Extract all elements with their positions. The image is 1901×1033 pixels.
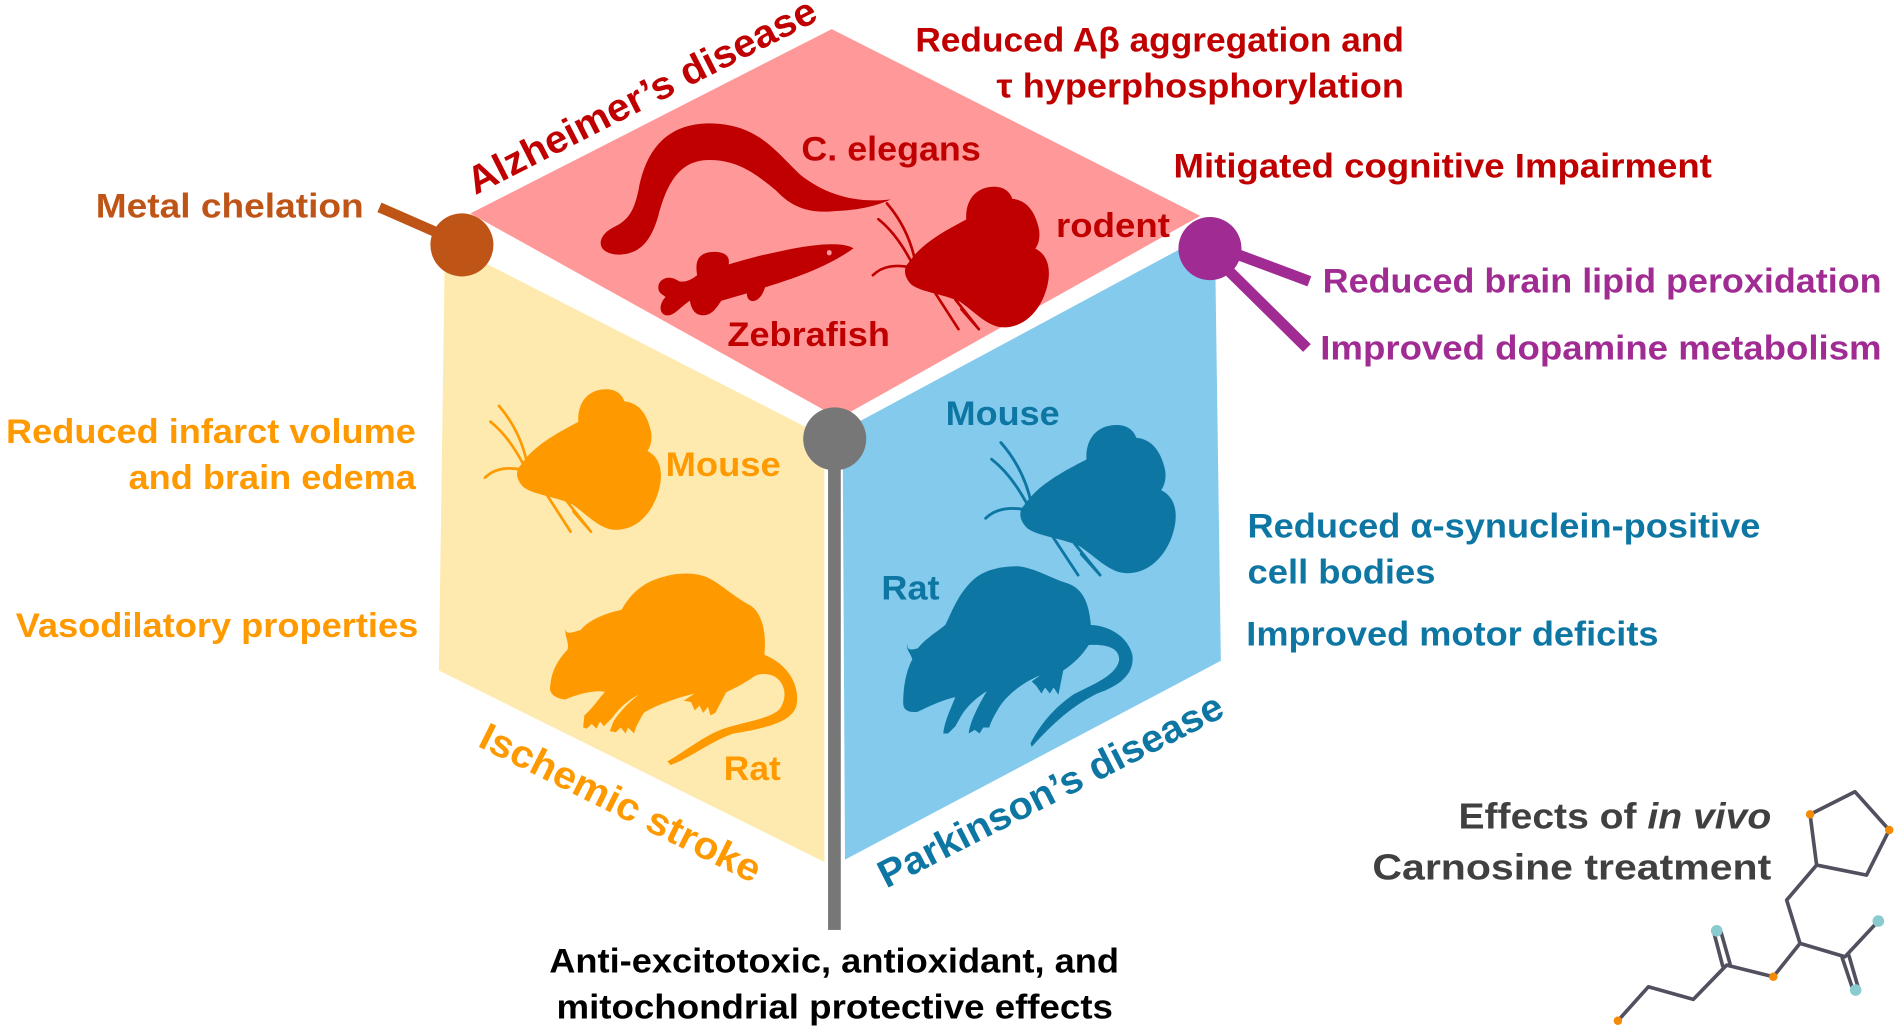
text: shared protective effects: [549, 942, 1119, 1026]
panel: Alzheimer's disease: [470, 29, 1200, 418]
text: stroke outcomes: Vasodilatory properties: [16, 607, 418, 645]
title: Effects of in vivo: [1458, 796, 1771, 837]
text: animal labels, stroke panel: Mouse: [666, 446, 781, 484]
title: [1372, 796, 1771, 887]
text: animal labels, stroke panel: Rat: [724, 750, 781, 788]
text: Alzheimer's outcomes: Mitigated cognitive Impairment: [1174, 148, 1712, 186]
panel: Parkinson's disease: [843, 230, 1221, 860]
text: Parkinson's outcomes: Reduced α-synuclein-positive: [1248, 508, 1760, 546]
icon: zebrafish: [658, 244, 854, 315]
heading: Alzheimer's disease: Alzheimer’s disease: [460, 0, 824, 203]
text: shared protective effects: mitochondrial protective effects: [556, 988, 1113, 1026]
text: purple outcomes: [1320, 263, 1882, 367]
icon: C. elegans worm: [601, 123, 891, 255]
connector: metal chelation pin: [379, 207, 493, 276]
text: stroke outcomes: Reduced infarct volume: [6, 413, 416, 451]
text: Alzheimer's outcomes: τ hyperphosphorylation: [997, 68, 1404, 106]
icon: rat (ischemic stroke): [550, 574, 797, 765]
text: purple outcomes: Improved dopamine metabolism: [1320, 329, 1882, 367]
icon: mouse (Parkinson's disease): [986, 425, 1176, 575]
text: animal labels, Alzheimer's panel: [727, 131, 1170, 354]
text: animal labels, stroke panel: [666, 446, 781, 788]
text: animal labels, Parkinson's panel: Rat: [881, 569, 940, 607]
text: Alzheimer's outcomes: [915, 21, 1712, 186]
text: shared protective effects: Anti-excitotoxic, antioxidant, and: [549, 942, 1119, 980]
text: animal labels, Alzheimer's panel: rodent: [1056, 207, 1170, 245]
text: Parkinson's outcomes: Improved motor deficits: [1246, 615, 1659, 653]
text: stroke outcomes: and brain edema: [129, 459, 417, 497]
text: animal labels, Alzheimer's panel: C. elegans: [801, 131, 981, 169]
icon: rodent: [873, 187, 1049, 329]
text: Metal chelation: Metal chelation: [96, 188, 364, 226]
text: animal labels, Parkinson's panel: Mouse: [946, 395, 1060, 433]
text: Parkinson's outcomes: cell bodies: [1248, 554, 1435, 592]
text: animal labels, Parkinson's panel: [881, 395, 1060, 607]
text: animal labels, Alzheimer's panel: Zebrafish: [727, 316, 890, 354]
icon: rat (Parkinson's disease): [903, 566, 1133, 747]
heading: Ischemic stroke: Ischemic stroke: [472, 715, 768, 892]
icon: carnosine molecule: [1614, 792, 1893, 1025]
text: Alzheimer's outcomes: Reduced Aβ aggregation and: [915, 21, 1404, 59]
panel: Ischemic stroke: [439, 243, 824, 862]
text: Parkinson's outcomes: [1246, 508, 1760, 653]
heading: Parkinson's disease: Parkinson’s disease: [871, 685, 1231, 897]
connector: purple pin with two branches: [1178, 217, 1309, 348]
title: Carnosine treatment: [1372, 846, 1771, 887]
connector: central grey pin: [803, 407, 866, 930]
text: stroke outcomes: [6, 413, 418, 645]
text: purple outcomes: Reduced brain lipid peroxidation: [1323, 263, 1882, 301]
icon: mouse (ischemic stroke): [485, 389, 661, 532]
